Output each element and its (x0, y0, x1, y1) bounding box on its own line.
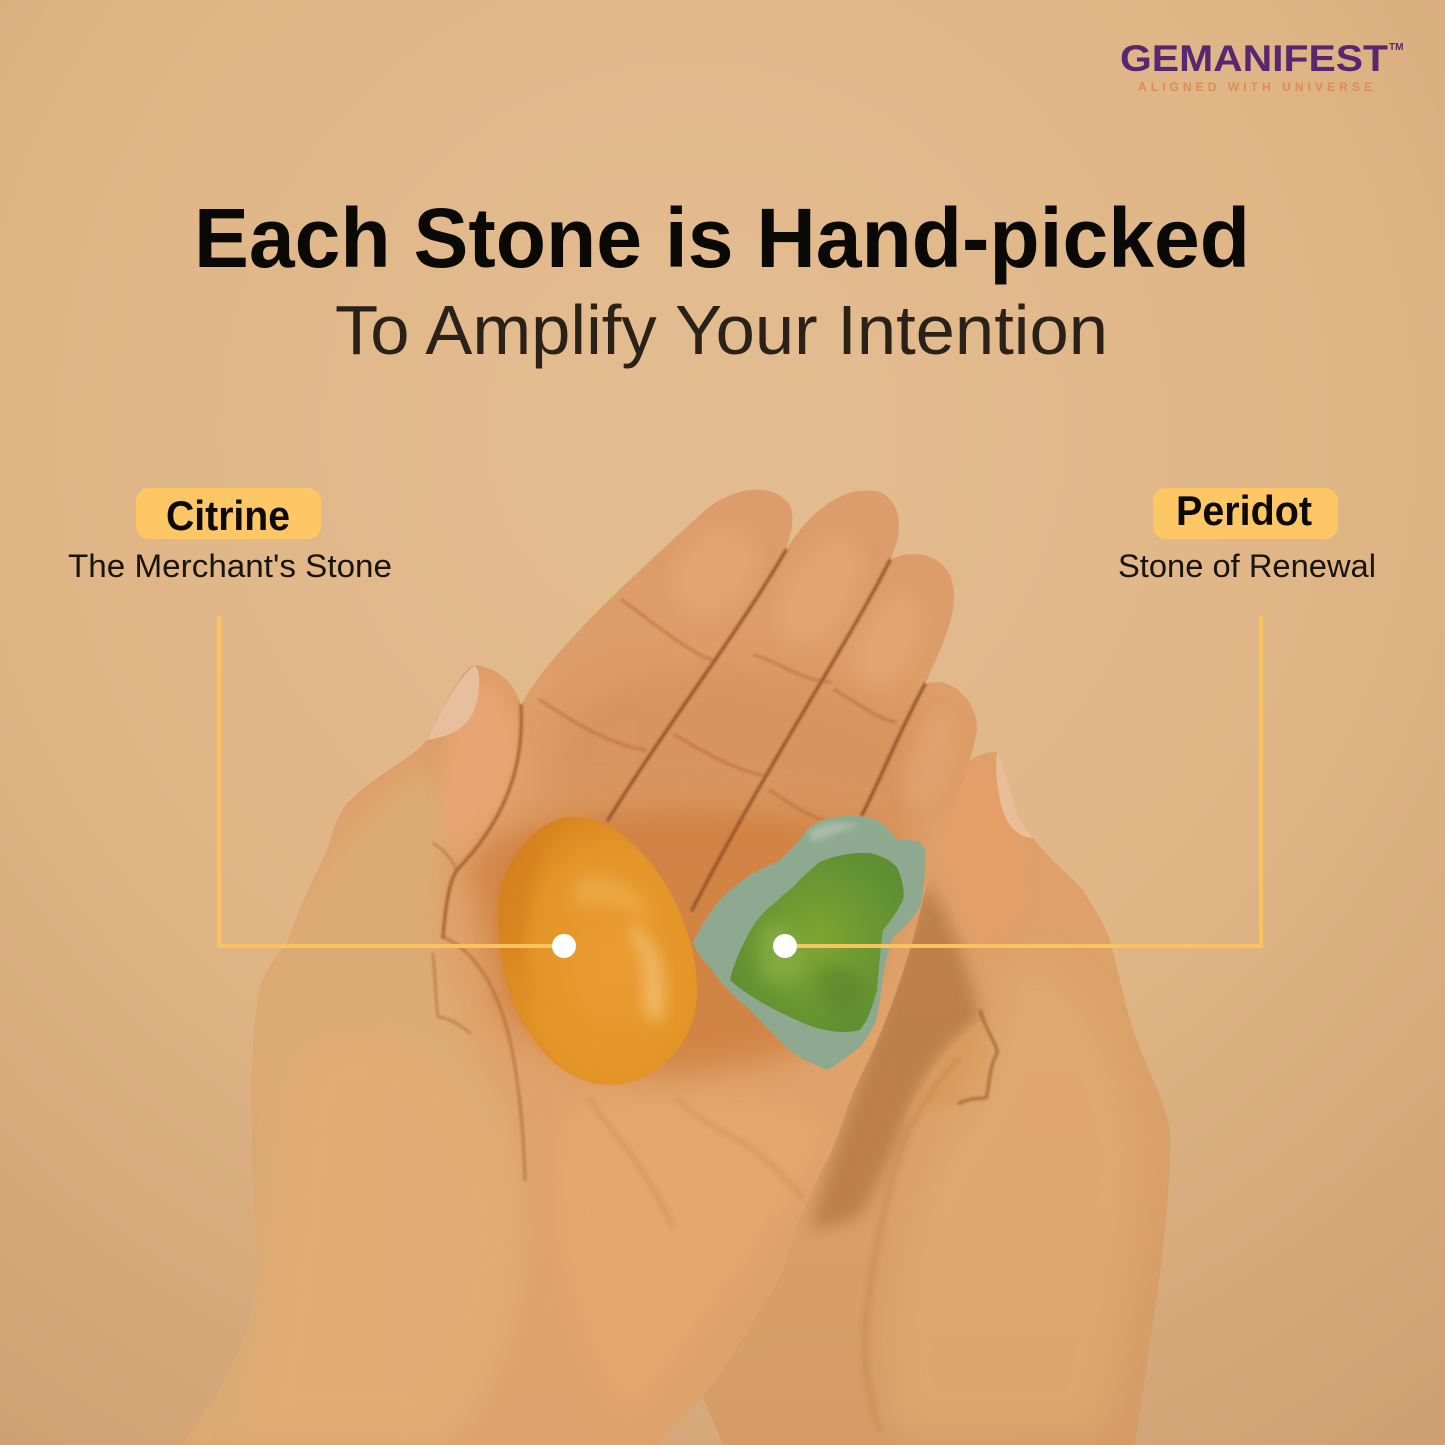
title (194, 191, 1250, 369)
left thumbnail (427, 665, 479, 740)
illustration: cupped hands (170, 470, 1190, 1445)
finger shading (562, 675, 913, 807)
logo: ALIGNED WITH UNIVERSE (1138, 80, 1372, 94)
connector: citrine (219, 616, 576, 958)
connector: peridot (773, 616, 1261, 958)
right fingertip glow (958, 800, 1012, 932)
citrine marker (552, 934, 576, 958)
outer hand pale tone (212, 778, 484, 1430)
citrine stone (498, 817, 697, 1085)
label: peridot (1118, 487, 1376, 584)
title: Each Stone is Hand-picked (194, 191, 1250, 285)
palm lines (590, 1100, 803, 1227)
left hand (170, 470, 1000, 1445)
logo: GEMANIFEST (1120, 38, 1388, 79)
gaps between fingers (608, 550, 925, 910)
right hand dark fold (810, 880, 980, 1230)
knuckle lines (540, 600, 895, 825)
right inner curl (928, 1048, 974, 1110)
palm orange glow around stones (470, 803, 900, 1073)
right hand (690, 740, 1190, 1445)
logo: TM (1389, 42, 1403, 53)
peridot marker (773, 934, 797, 958)
label: peridot: Stone of Renewal (1118, 548, 1376, 584)
right lower palm crease (865, 1057, 960, 1433)
label: citrine (68, 488, 392, 584)
palm warm centre (554, 1096, 830, 1420)
label: citrine: Citrine (166, 492, 290, 539)
right thumbnail (996, 752, 1033, 838)
peridot stone (693, 816, 925, 1070)
thumb tip (449, 691, 512, 848)
palm heel light (240, 1041, 516, 1430)
label: citrine: The Merchant's Stone (68, 548, 392, 584)
thumb edge and thumb mound (433, 705, 525, 1180)
right thumb crease (958, 1010, 997, 1104)
title: To Amplify Your Intention (335, 291, 1108, 369)
fingertip shading (686, 538, 951, 801)
right palm pale (906, 1070, 1116, 1419)
label: peridot: Peridot (1176, 487, 1312, 534)
logo (1120, 38, 1403, 94)
